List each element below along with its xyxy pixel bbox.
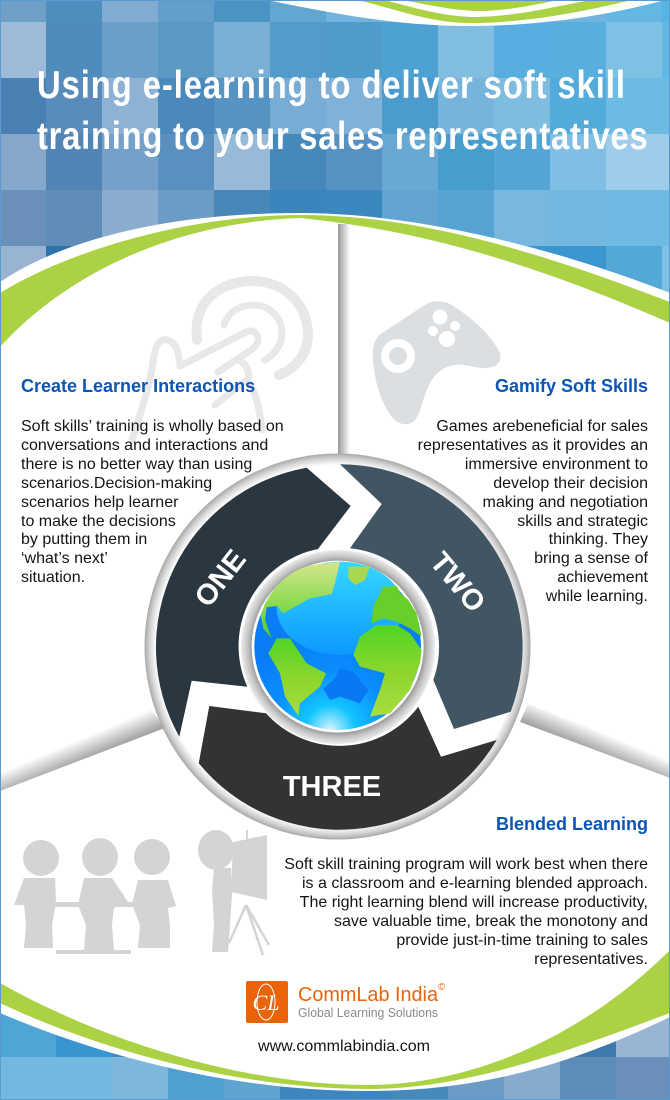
icon: globe: [252, 561, 424, 733]
body text: [418, 418, 649, 605]
logo: CommLab India: [246, 981, 446, 1023]
label: ONE: ONE: [189, 544, 253, 613]
body text: develop their decision: [493, 475, 648, 492]
body text: conversations and interactions and: [21, 437, 268, 454]
logo mark: [246, 981, 288, 1023]
body text: Soft skill training program will work best when there: [284, 856, 648, 873]
divider: lower left: [0, 708, 165, 791]
body text: bring a sense of: [534, 550, 649, 567]
divider: vertical: [338, 224, 350, 456]
background: top blue mosaic: [0, 0, 670, 310]
body text: skills and strategic: [517, 513, 648, 530]
white content panel: [0, 213, 670, 1091]
icon: hand tapping: [132, 281, 308, 440]
body text: The right learning blend will increase productivity,: [300, 894, 648, 911]
body text: achievement: [557, 569, 649, 586]
body text: situation.: [21, 569, 85, 586]
website url: www.commlabindia.com: [257, 1038, 430, 1055]
logo wordmark: CommLab India: [298, 984, 439, 1006]
body text: Games arebeneficial for sales: [436, 418, 648, 435]
logo tagline: Global Learning Solutions: [298, 1005, 438, 1020]
text block: Blended Learning: [284, 814, 648, 968]
illustration: teacher at board: [198, 830, 269, 955]
body text: to make the decisions: [21, 513, 176, 530]
body text: representatives.: [534, 951, 648, 968]
cycle diagram: [144, 454, 530, 840]
text block: Gamify Soft Skills: [418, 376, 649, 605]
body text: Soft skills’ training is wholly based on: [21, 418, 284, 435]
logo mark: CL: [253, 990, 279, 1015]
body text: immersive environment to: [465, 456, 648, 473]
top ribbon swoosh: [267, 0, 665, 26]
body text: by putting them in: [21, 531, 147, 548]
text block: Create Learner Interactions: [21, 376, 284, 586]
divider: lower right: [520, 704, 670, 778]
body text: is a classroom and e-learning blended approach.: [302, 875, 648, 892]
title: training to your sales representatives: [37, 113, 648, 158]
body text: [284, 856, 648, 968]
title: [37, 62, 648, 158]
heading: Create Learner Interactions: [21, 376, 255, 396]
green swoosh: upper: [0, 215, 670, 347]
label: THREE: THREE: [283, 771, 381, 803]
body text: [21, 418, 284, 586]
heading: Gamify Soft Skills: [495, 376, 648, 396]
body text: there is no better way than using: [21, 456, 252, 473]
body text: thinking. They: [549, 531, 648, 548]
body text: representatives as it provides an: [418, 437, 648, 454]
background: bottom blue mosaic: [0, 1001, 670, 1100]
green swoosh: lower: [0, 950, 670, 1089]
outer ring: [144, 454, 530, 840]
segment three: [199, 706, 497, 830]
body text: provide just-in-time training to sales: [396, 932, 648, 949]
body text: while learning.: [545, 588, 648, 605]
title: Using e-learning to deliver soft skill: [37, 62, 625, 107]
body text: scenarios help learner: [21, 494, 179, 511]
body text: making and negotiation: [483, 494, 648, 511]
body text: save valuable time, break the monotony and: [334, 913, 648, 930]
body text: scenarios.Decision-making: [21, 475, 212, 492]
segment one: [156, 468, 351, 737]
icon: game controller: [373, 301, 500, 424]
label: TWO: TWO: [423, 546, 491, 619]
copyright mark: ©: [438, 982, 446, 993]
illustration: classroom learners: [14, 838, 176, 954]
body text: ‘what’s next’: [21, 550, 108, 567]
heading: Blended Learning: [496, 814, 648, 834]
segment two: [340, 464, 523, 729]
inner ring: [241, 550, 435, 744]
